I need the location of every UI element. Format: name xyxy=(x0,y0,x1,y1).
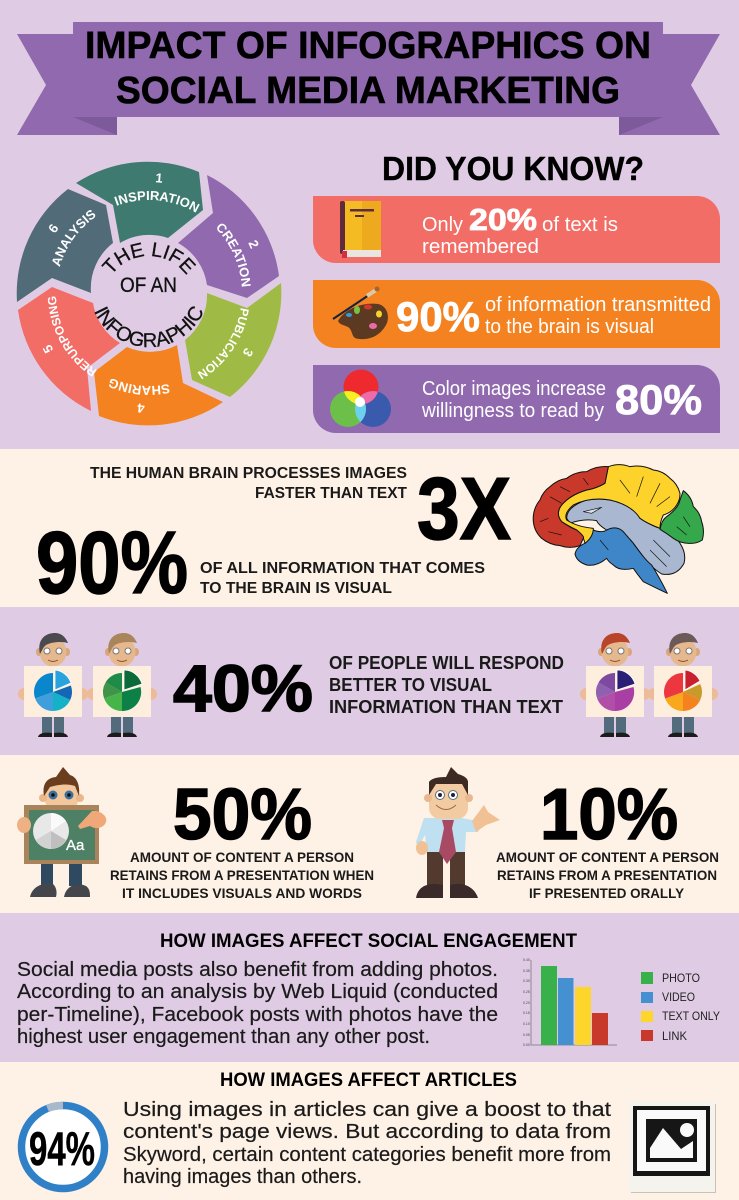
heading: social engagement: HOW IMAGES AFFECT SOCIAL ENGAGEMENT xyxy=(160,931,577,952)
paragraph: articles: Using images in articles can give a boost to that xyxy=(123,1099,612,1121)
big number 10 percent: 10% xyxy=(540,775,678,855)
big number 90 percent: 90% xyxy=(36,513,188,612)
figure: man presenting with tie xyxy=(416,767,500,898)
text: respond to visual xyxy=(329,653,564,717)
paragraph: social engagement: highest user engagement than any other post. xyxy=(17,1026,430,1048)
heading: did you know: DID YOU KNOW? xyxy=(382,150,644,187)
panel: social engagement xyxy=(0,913,739,1062)
stat card: 20 percent: remembered xyxy=(422,236,539,258)
figure: man with green pie xyxy=(87,633,157,737)
chart: life of an infographic wheel xyxy=(16,162,282,426)
figure: man with blue pie xyxy=(18,633,88,737)
big number 50 percent: 50% xyxy=(173,775,312,855)
segment 3 publication: PUBLICATION xyxy=(198,308,249,380)
paragraph: articles xyxy=(123,1099,612,1188)
text: information visual: OF ALL INFORMATION THAT COMES xyxy=(200,560,485,577)
bar chart: engagement by post type: 0.25 xyxy=(523,990,530,994)
text: visuals and words: RETAINS FROM A PRESENTATION WHEN xyxy=(110,867,374,883)
paragraph: articles: content's page views. But according to data from xyxy=(123,1121,611,1143)
title banner: IMPACT OF INFOGRAPHICS ON xyxy=(85,25,651,67)
bar chart: engagement by post type: 0.40 xyxy=(523,958,530,962)
wheel centre label xyxy=(94,242,202,348)
stat card: 80 percent xyxy=(313,365,720,433)
text: visuals and words: IT INCLUDES VISUALS AND WORDS xyxy=(122,885,362,901)
bar chart: engagement by post type: 0.15 xyxy=(523,1011,530,1015)
segment 3 publication: 3 xyxy=(243,348,252,356)
segment 2 creation: 2 xyxy=(248,240,258,249)
stat card: 90 percent xyxy=(313,280,720,348)
figure: teacher with chalkboard: Aa xyxy=(66,837,85,854)
stat card: 80 percent: willingness to read by xyxy=(421,400,604,422)
paragraph: social engagement: per-Timeline), Facebook posts with photos have the xyxy=(17,1004,498,1026)
figure: man with red pie xyxy=(648,633,718,737)
chart legend: VIDEO xyxy=(662,990,695,1004)
heading: articles: HOW IMAGES AFFECT ARTICLES xyxy=(220,1070,517,1091)
chart legend: LINK xyxy=(662,1029,687,1043)
chart legend xyxy=(641,971,720,1043)
paragraph: articles: having images than others. xyxy=(123,1166,362,1188)
text: visuals and words xyxy=(110,849,374,901)
chart legend: PHOTO xyxy=(662,971,700,985)
text: visuals and words: AMOUNT OF CONTENT A PERSON xyxy=(130,849,354,865)
title banner: SOCIAL MEDIA MARKETING xyxy=(116,70,620,112)
big number 40 percent: 40% xyxy=(173,651,313,725)
stat card: 80 percent: 80% xyxy=(615,376,702,423)
stat card: 90 percent: to the brain is visual xyxy=(485,316,654,338)
stat card: 90 percent: 90% xyxy=(396,293,480,340)
segment 2 creation xyxy=(178,175,279,298)
donut: 94 percent: 94% xyxy=(29,1122,95,1175)
icon: book xyxy=(340,201,381,258)
stat card: 20 percent xyxy=(313,196,720,263)
bar chart: engagement by post type xyxy=(523,958,617,1047)
panel: did you know and life cycle xyxy=(16,22,720,433)
paragraph: social engagement xyxy=(17,959,498,1048)
stat card: 20 percent: of text is xyxy=(542,214,618,236)
wheel centre label: THE LIFE xyxy=(101,242,196,275)
wheel centre label: INFOGRAPHIC xyxy=(94,306,202,348)
donut: 94 percent xyxy=(22,1106,104,1188)
paragraph: social engagement: According to an analysis by Web Liquid (conducted xyxy=(17,981,498,1003)
stat card: 20 percent: 20% xyxy=(469,202,537,237)
text: presented orally: AMOUNT OF CONTENT A PERSON xyxy=(496,849,719,865)
segment 5 repurposing xyxy=(18,287,120,411)
panel: people respond better xyxy=(0,607,739,755)
text: respond to visual: OF PEOPLE WILL RESPOND xyxy=(329,653,564,673)
text: images faster: FASTER THAN TEXT xyxy=(255,485,407,502)
segment 4 sharing xyxy=(94,345,223,426)
stat card: 20 percent: Only xyxy=(422,214,463,236)
figure: teacher with chalkboard xyxy=(17,767,106,897)
segment 6 analysis: ANALYSIS xyxy=(52,210,96,267)
segment 4 sharing: 4 xyxy=(138,404,145,413)
text: information visual: TO THE BRAIN IS VISUAL xyxy=(200,580,392,597)
text: respond to visual: BETTER TO VISUAL xyxy=(329,675,492,695)
segment 5 repurposing: REPURPOSING xyxy=(48,296,97,376)
wheel centre label: OF AN xyxy=(120,274,177,297)
icon: photo card xyxy=(629,1102,716,1193)
segment 3 publication xyxy=(185,283,282,397)
stat card: 90 percent: of information transmitted xyxy=(485,294,711,316)
segment 6 analysis xyxy=(16,189,113,302)
big number 3X: 3X xyxy=(417,459,511,558)
bar chart: engagement by post type: 0.00 xyxy=(523,1043,530,1047)
chart legend: TEXT ONLY xyxy=(662,1009,720,1023)
segment 6 analysis: 6 xyxy=(49,224,58,232)
title banner xyxy=(17,22,720,135)
panel: content retention xyxy=(0,755,739,913)
paragraph: articles: Skyword, certain content categories benefit more from xyxy=(123,1144,611,1166)
text: presented orally: RETAINS FROM A PRESENTATION xyxy=(497,867,717,883)
segment 1 inspiration: 1 xyxy=(156,174,162,183)
icon: paint palette xyxy=(333,286,388,339)
figure: man with purple pie xyxy=(580,633,650,737)
text: images faster xyxy=(90,465,407,502)
text: images faster: THE HUMAN BRAIN PROCESSES IMAGES xyxy=(90,465,407,482)
segment 4 sharing: SHARING xyxy=(108,379,170,395)
segment 1 inspiration: INSPIRATION xyxy=(114,191,200,212)
text: respond to visual: INFORMATION THAN TEXT xyxy=(329,697,563,717)
segment 2 creation: CREATION xyxy=(217,224,251,287)
bar chart: engagement by post type: 0.10 xyxy=(523,1022,530,1026)
segment 5 repurposing: 5 xyxy=(42,345,52,354)
paragraph: social engagement: Social media posts also benefit from adding photos. xyxy=(17,959,498,981)
icon: brain xyxy=(533,465,703,593)
icon: colour circles xyxy=(330,370,391,427)
stat card: 80 percent: Color images increase xyxy=(422,378,606,400)
text: presented orally: IF PRESENTED ORALLY xyxy=(529,885,685,901)
text: information visual xyxy=(200,560,485,597)
bar chart: engagement by post type: 0.30 xyxy=(523,979,530,983)
bar chart: engagement by post type: 0.20 xyxy=(523,1001,530,1005)
segment 1 inspiration xyxy=(76,162,203,243)
text: presented orally xyxy=(496,849,719,901)
bar chart: engagement by post type: 0.05 xyxy=(523,1033,530,1037)
panel: articles xyxy=(0,1062,739,1200)
bar chart: engagement by post type: 0.35 xyxy=(523,969,530,973)
panel: brain statistics xyxy=(0,449,739,612)
